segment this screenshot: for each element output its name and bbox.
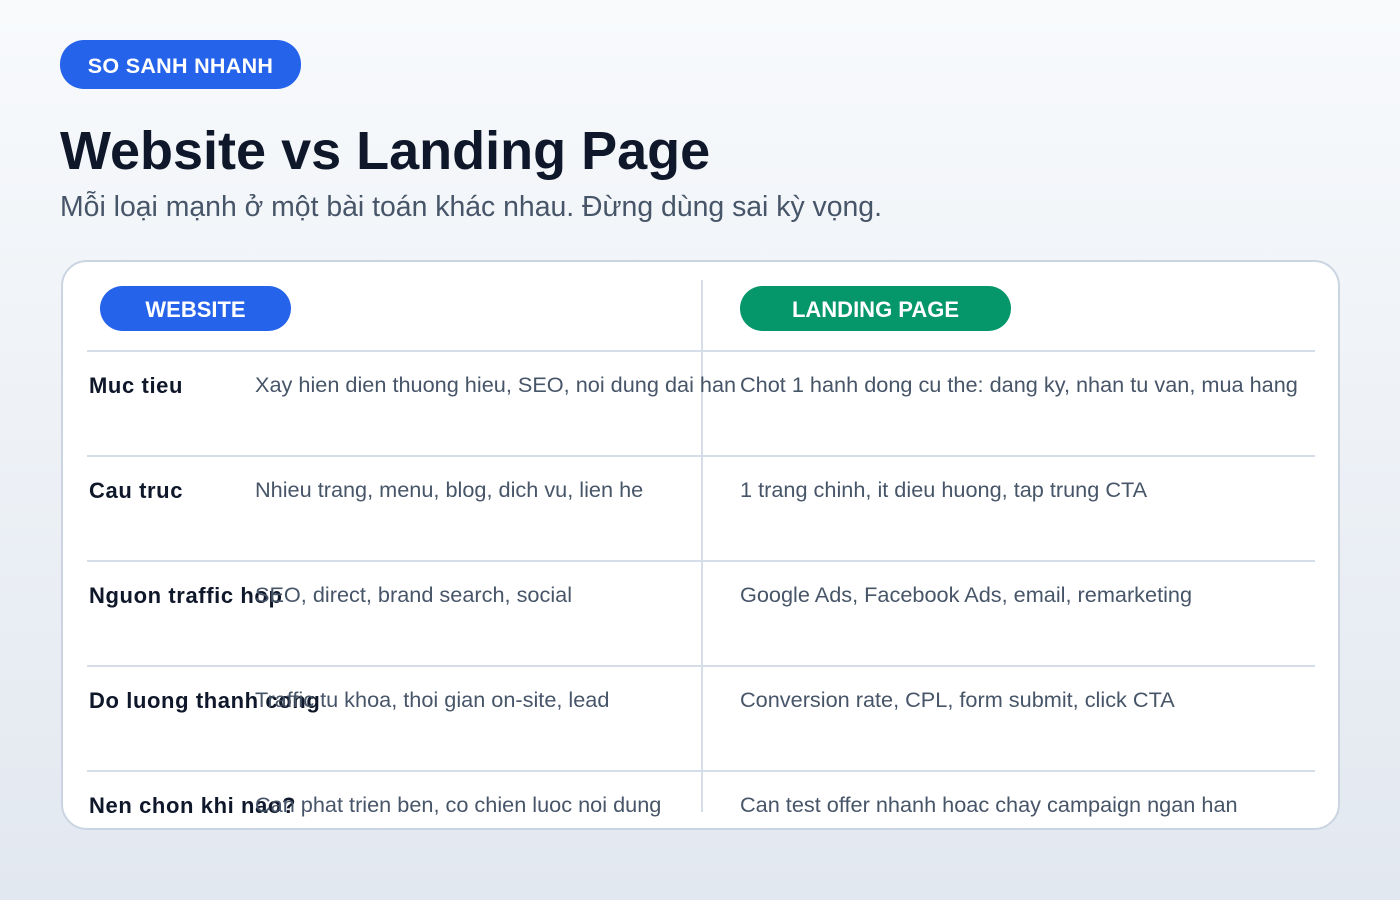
panel: comparison table xyxy=(61,260,1340,830)
row: cau truc xyxy=(89,477,1147,503)
row: cau truc: 1 trang chinh, it dieu huong, tap trung CTA xyxy=(740,477,1147,502)
row: do luong: Do luong thanh cong xyxy=(89,688,320,713)
row: nen chon: Can phat trien ben, co chien luoc noi dung xyxy=(255,792,661,817)
row: nguon traffic: Google Ads, Facebook Ads, email, remarketing xyxy=(740,582,1192,607)
row: do luong xyxy=(89,687,1175,713)
row: nguon traffic: Nguon traffic hop xyxy=(89,583,283,608)
column divider xyxy=(701,280,703,812)
pill: website xyxy=(100,286,291,331)
row: nguon traffic xyxy=(89,582,1192,608)
title: Website vs Landing Page xyxy=(60,121,710,181)
row: muc tieu: Muc tieu xyxy=(89,373,183,398)
pill: landing page: LANDING PAGE xyxy=(792,297,959,322)
row: nen chon: Nen chon khi nao? xyxy=(89,793,296,818)
row: nen chon xyxy=(89,792,1238,818)
badge xyxy=(60,40,301,89)
row: do luong: Conversion rate, CPL, form submit, click CTA xyxy=(740,687,1175,712)
row: nen chon: Can test offer nhanh hoac chay campaign ngan han xyxy=(740,792,1238,817)
subtitle: Mỗi loại mạnh ở một bài toán khác nhau. Đừng dùng sai kỳ vọng. xyxy=(60,191,882,223)
pill: landing page xyxy=(740,286,1011,331)
row: muc tieu xyxy=(89,372,1298,398)
row: cau truc: Nhieu trang, menu, blog, dich vu, lien he xyxy=(255,477,643,502)
row: nguon traffic: SEO, direct, brand search, social xyxy=(255,582,572,607)
badge: SO SANH NHANH xyxy=(88,54,273,78)
row: muc tieu: Chot 1 hanh dong cu the: dang ky, nhan tu van, mua hang xyxy=(740,372,1298,397)
row: cau truc: Cau truc xyxy=(89,478,183,503)
row: do luong: Traffic tu khoa, thoi gian on-site, lead xyxy=(255,687,609,712)
pill: website: WEBSITE xyxy=(145,297,246,322)
row: muc tieu: Xay hien dien thuong hieu, SEO, noi dung dai han xyxy=(255,372,736,397)
